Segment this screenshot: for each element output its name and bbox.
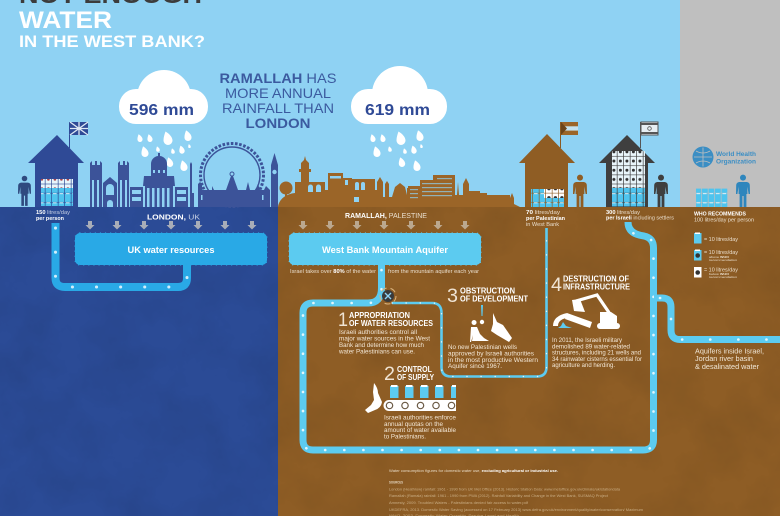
title: WATER bbox=[19, 7, 112, 34]
section 2: control of supply: amount of water available bbox=[384, 427, 456, 434]
section 3: obstruction of development: No new Palestinian wells bbox=[448, 344, 517, 351]
section 1: appropriation: 1 bbox=[338, 310, 348, 331]
section 4: destruction of infrastructure: 4 bbox=[551, 275, 562, 296]
label: Israeli consumption: 300 litres/day bbox=[606, 210, 640, 216]
text: Israeli water sources: & desalinated water bbox=[695, 362, 760, 371]
footnote and sources: Ramallah (Ramala) rainfall: 1961 - 1990 from PWA (2012). Rainfall Variability and Change in the West Bank, SUSMAQ Project bbox=[389, 493, 609, 498]
label: London, UK: LONDON, UK bbox=[147, 212, 200, 222]
text: WHO recommends: WHO RECOMMENDS bbox=[694, 212, 746, 218]
background: West Bank ground bbox=[278, 207, 780, 516]
label: UK consumption: 150 litres/day bbox=[36, 210, 70, 216]
section 3: obstruction of development: Aquifer since 1967. bbox=[448, 363, 502, 370]
Israeli house with flag bbox=[599, 122, 658, 207]
WHO logo: World Health bbox=[716, 151, 756, 158]
text: Israeli water sources: Aquifers inside Israel, bbox=[695, 346, 764, 356]
section 2: control of supply: to Palestinians. bbox=[384, 433, 426, 440]
section 3: obstruction of development: OF DEVELOPMENT bbox=[460, 294, 528, 304]
panel: West Bank Mountain Aquifer bbox=[289, 233, 481, 265]
flag: Palestine bbox=[560, 122, 578, 148]
legend: bottle values: = 10 litres/day bbox=[704, 237, 738, 243]
London skyline windows bbox=[92, 170, 277, 207]
section 4: destruction of infrastructure: 34 rainwater cisterns essential for bbox=[552, 356, 643, 363]
WHO logo bbox=[692, 146, 756, 168]
cloud: London rainfall bbox=[119, 70, 208, 124]
icon: water line and drop bbox=[480, 305, 484, 324]
person: UK bbox=[18, 176, 31, 206]
text: Israeli water sources bbox=[695, 346, 764, 371]
text: WHO recommends bbox=[694, 212, 754, 224]
section 1: appropriation: Israeli authorities control all bbox=[339, 329, 417, 336]
label: UK consumption: per person bbox=[36, 216, 64, 222]
section 4: destruction of infrastructure: agriculture and herding. bbox=[552, 362, 615, 369]
flag: Israel bbox=[640, 122, 658, 148]
panel: West Bank Mountain Aquifer: West Bank Mountain Aquifer bbox=[322, 245, 448, 255]
label: Palestinian consumption bbox=[526, 210, 565, 228]
water bottles: Palestinian house bbox=[531, 189, 564, 207]
pipe: Israeli branch bbox=[654, 298, 780, 340]
text: Israel takes over 80%: from the mountain aquifer each year bbox=[388, 269, 479, 275]
label: Palestinian consumption: per Palestinian bbox=[526, 216, 565, 222]
icon: conveyor of water bottles bbox=[384, 385, 456, 411]
text: WHO recommends: 100 litres/day per person bbox=[694, 218, 754, 224]
icon: valve bbox=[380, 288, 396, 304]
cloud: Ramallah rainfall: 619 mm bbox=[365, 102, 430, 119]
legend: bottle values: below WHO bbox=[709, 272, 730, 276]
icon: excavator breaking pipe bbox=[553, 295, 620, 329]
rain drops: London bbox=[137, 130, 192, 171]
section 2: control of supply: OF SUPPLY bbox=[397, 373, 435, 382]
London skyline bbox=[90, 144, 278, 207]
UK house with flag bbox=[28, 122, 88, 207]
headline: Ramallah has more rainfall: RAMALLAH HAS bbox=[220, 70, 336, 86]
section 3: obstruction of development: 3 bbox=[447, 286, 458, 307]
WHO logo: Organization bbox=[716, 158, 756, 166]
background: sky bbox=[0, 0, 780, 207]
icon: worker digging bbox=[470, 320, 489, 342]
section 4: destruction of infrastructure: demolished 89 water-related bbox=[552, 344, 630, 350]
label: Israeli consumption bbox=[606, 210, 674, 222]
background: WHO grey panel bbox=[680, 0, 780, 207]
footnote and sources bbox=[389, 468, 644, 516]
title bbox=[19, 0, 205, 51]
text: Israeli water sources: Jordan river basin bbox=[695, 354, 753, 363]
legend: bottle values: = 10 litres/day bbox=[704, 268, 738, 274]
water bottles: UK house bbox=[41, 179, 73, 206]
cloud: London rainfall: 596 mm bbox=[129, 102, 194, 119]
legend: bottle values: above WHO bbox=[709, 255, 730, 259]
section 2: control of supply: 2 bbox=[384, 364, 395, 385]
icon: stopping hand bbox=[491, 313, 512, 342]
section 4: destruction of infrastructure bbox=[551, 274, 643, 369]
section 3: obstruction of development: in the most productive Western bbox=[448, 357, 538, 364]
arrows: rain into mountain aquifer bbox=[298, 221, 470, 230]
pipe: Palestinian share loop bbox=[303, 222, 654, 450]
person: Palestinian bbox=[573, 175, 587, 207]
section 1: appropriation: APPROPRIATION bbox=[349, 311, 410, 320]
section 2: control of supply: CONTROL bbox=[397, 365, 432, 374]
legend: bottle values: = 10 litres/day bbox=[704, 250, 738, 256]
label: Israeli consumption: per Israeli including settlers bbox=[606, 216, 674, 222]
legend: bottle values: recommendation bbox=[709, 275, 738, 279]
pipe: thin supply to Palestinians bbox=[392, 228, 546, 376]
footnote and sources: Amnesty, 2009. Troubled Waters - Palestinians denied fair access to water.pdf bbox=[389, 500, 529, 505]
title: IN THE WEST BANK? bbox=[19, 32, 205, 51]
headline: Ramallah has more rainfall: RAINFALL THAN bbox=[222, 100, 334, 116]
headline: Ramallah has more rainfall: MORE ANNUAL bbox=[225, 85, 331, 101]
Palestinian house with flag bbox=[519, 122, 578, 207]
section 2: control of supply: Israeli authorities enforce bbox=[384, 414, 456, 422]
footnote and sources: Water consumption figures for domestic water use, excluding agricultural or industrial use. bbox=[389, 468, 558, 473]
section 2: control of supply: annual quotas on the bbox=[384, 421, 443, 428]
arrows: rain into UK resources bbox=[86, 221, 256, 230]
footnote and sources: London (Heathrow) rainfall: 1961 - 1990 from UK Met Office (2013). Historic Station Data: www.metoffice.gov.uk/climate/uk/stationdata bbox=[389, 486, 621, 492]
label: Ramallah, Palestine: RAMALLAH, PALESTINE bbox=[345, 211, 427, 220]
headline: Ramallah has more rainfall bbox=[220, 70, 336, 131]
legend: bottle values: recommendation bbox=[709, 258, 738, 262]
flag: UK bbox=[69, 122, 88, 148]
section 1: appropriation: water Palestinians can use. bbox=[338, 348, 415, 356]
legend: bottle values bbox=[694, 232, 738, 279]
Ramallah skyline bbox=[278, 156, 520, 207]
section 4: destruction of infrastructure: In 2011, the Israeli military bbox=[552, 337, 623, 344]
section 1: appropriation bbox=[338, 310, 434, 356]
label: Palestinian consumption: in West Bank bbox=[526, 222, 559, 228]
person: WHO bbox=[736, 175, 750, 207]
Ramallah skyline windows bbox=[308, 176, 452, 202]
section 1: appropriation: major water sources in the West bbox=[339, 336, 430, 342]
panel: UK water resources bbox=[75, 233, 267, 265]
text: Israel takes over 80% bbox=[290, 269, 479, 275]
pipe: UK supply bbox=[56, 223, 187, 287]
section 3: obstruction of development bbox=[447, 286, 538, 370]
section 2: control of supply bbox=[365, 364, 456, 440]
background: UK ground bbox=[0, 207, 279, 516]
section 4: destruction of infrastructure: DESTRUCTION OF bbox=[563, 274, 629, 284]
section 3: obstruction of development: approved by Israeli authorities bbox=[448, 350, 534, 358]
section 4: destruction of infrastructure: INFRASTRUCTURE bbox=[563, 282, 631, 292]
water bottles: WHO bbox=[696, 189, 728, 207]
text: Israel takes over 80%: Israel takes over 80% of the water bbox=[290, 269, 376, 275]
rain drops: Ramallah bbox=[370, 130, 424, 171]
section 4: destruction of infrastructure: structures, including 21 wells and bbox=[552, 350, 641, 356]
section 1: appropriation: OF WATER RESOURCES bbox=[349, 319, 434, 328]
footnote and sources: UKDEFRA, 2013. Domestic Water Saving (accessed on 17 February 2013) www.defra.gov.uk/environment/quality/water/conservation/ Maximum bbox=[389, 507, 644, 512]
panel: UK water resources: UK water resources bbox=[128, 245, 214, 255]
section 3: obstruction of development: OBSTRUCTION bbox=[460, 286, 515, 296]
footnote and sources: SOURCES bbox=[389, 480, 403, 484]
section 1: appropriation: Bank and determine how much bbox=[339, 342, 424, 349]
icon: stop hand bbox=[365, 383, 382, 413]
label: Palestinian consumption: 70 litres/day bbox=[526, 210, 560, 216]
headline: Ramallah has more rainfall: LONDON bbox=[246, 115, 310, 131]
background texture bbox=[0, 207, 780, 516]
water bottles: Israeli house bbox=[612, 151, 645, 206]
person: Israeli bbox=[654, 175, 668, 207]
cloud: Ramallah rainfall bbox=[351, 66, 447, 124]
label: UK consumption bbox=[36, 210, 70, 222]
